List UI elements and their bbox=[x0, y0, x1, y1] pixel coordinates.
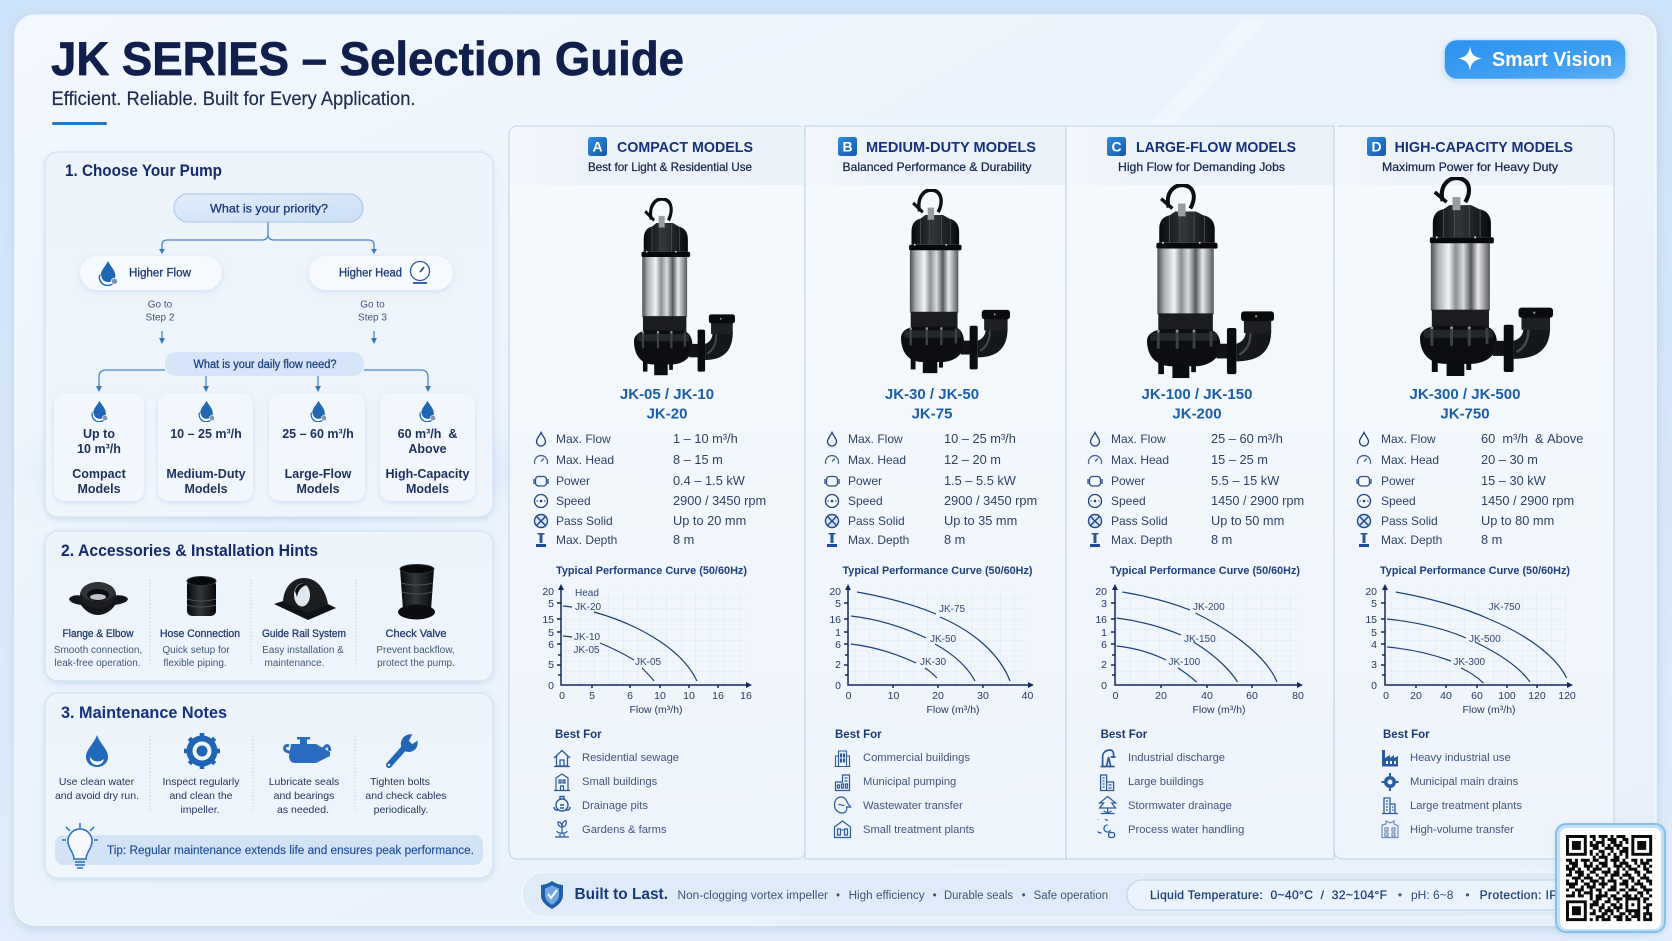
spec table B: 2900 / 3450 rpm bbox=[944, 493, 1037, 508]
performance chart D: 0 bbox=[1371, 680, 1377, 692]
performance chart C: 60 bbox=[1246, 690, 1258, 702]
spec table D bbox=[1357, 431, 1583, 547]
best for list B: Best For bbox=[835, 729, 882, 741]
accessory: hose connection bbox=[160, 576, 240, 669]
performance chart B: 0 bbox=[846, 690, 852, 702]
column header D: HIGH-CAPACITY MODELS bbox=[1394, 139, 1573, 156]
spec table D: 15 – 30 kW bbox=[1481, 473, 1547, 488]
model names B: JK-30 / JK-50 bbox=[885, 386, 979, 403]
note: inspect impeller: Inspect regularly bbox=[162, 776, 240, 788]
model card: medium-duty bbox=[158, 393, 253, 501]
panel: maintenance notes bbox=[45, 693, 493, 878]
performance chart D: 60 bbox=[1471, 690, 1483, 702]
footer spec pill bbox=[1127, 880, 1607, 910]
spec table B: 8 m bbox=[944, 532, 965, 547]
spec table C: Max. Head bbox=[1111, 453, 1169, 467]
column B: medium-duty models bbox=[805, 126, 1066, 859]
column header D bbox=[1367, 137, 1573, 174]
best for list D: Best For bbox=[1383, 729, 1430, 741]
accessory: guide rail system bbox=[262, 578, 346, 669]
performance chart A: Flow (m³/h) bbox=[629, 704, 683, 716]
accessory: check valve bbox=[376, 564, 455, 669]
performance chart B bbox=[829, 584, 1034, 716]
note: tighten bolts: periodically. bbox=[374, 804, 428, 816]
column header D: D bbox=[1371, 138, 1382, 154]
column header B bbox=[838, 137, 1036, 174]
spec table B: 1.5 – 5.5 kW bbox=[944, 473, 1017, 488]
performance chart A: JK-05 bbox=[574, 645, 600, 656]
title: JK SERIES – Selection Guide bbox=[51, 32, 684, 85]
note: go to step 3: Step 3 bbox=[358, 312, 387, 324]
note: inspect impeller: and clean the bbox=[169, 790, 233, 802]
best for list B: Wastewater transfer bbox=[863, 800, 963, 812]
spec table C: Max. Depth bbox=[1111, 533, 1172, 547]
tip bar bbox=[55, 823, 483, 868]
model card: medium-duty: Models bbox=[184, 482, 228, 496]
model card: high-capacity bbox=[380, 393, 475, 501]
spec table C: Max. Flow bbox=[1111, 432, 1166, 446]
performance chart C: JK-200 bbox=[1193, 602, 1225, 613]
best for list C: Large buildings bbox=[1128, 776, 1204, 788]
note: go to step 3: Go to bbox=[360, 300, 385, 310]
spec table A: Up to 20 mm bbox=[673, 513, 746, 528]
spec table D: 20 – 30 m bbox=[1481, 452, 1538, 467]
performance chart C: 80 bbox=[1292, 690, 1304, 702]
performance chart B: 0 bbox=[835, 680, 841, 692]
flowchart connectors bbox=[99, 222, 428, 388]
performance chart D: Flow (m³/h) bbox=[1462, 704, 1516, 716]
smart vision badge: Smart Vision bbox=[1492, 48, 1612, 71]
footer bar: built to last: Built to Last. bbox=[574, 886, 668, 903]
performance chart A: 0 bbox=[559, 690, 565, 702]
accessory: guide rail system: Easy installation & bbox=[262, 645, 344, 656]
performance chart D: 120 bbox=[1558, 690, 1576, 702]
pump image D bbox=[1420, 178, 1553, 376]
spec table A: Speed bbox=[556, 494, 591, 508]
footer bar: built to last: • bbox=[933, 890, 937, 902]
performance chart D: JK-300 bbox=[1453, 657, 1486, 668]
footer bar: built to last: Safe operation bbox=[1034, 890, 1108, 902]
accessory: check valve: Prevent backflow, bbox=[376, 645, 455, 656]
best for list D: Municipal main drains bbox=[1410, 776, 1519, 788]
performance chart D: 100 bbox=[1498, 690, 1516, 702]
performance chart D: 3 bbox=[1371, 659, 1377, 671]
spec table C: 15 – 25 m bbox=[1211, 452, 1268, 467]
tip bar: Tip: Regular maintenance extends life and ensures peak performance. bbox=[107, 845, 474, 857]
note: tighten bolts: and check cables bbox=[365, 790, 447, 802]
column header C: C bbox=[1111, 138, 1122, 154]
note: clean water: Use clean water bbox=[59, 776, 134, 788]
performance chart C: 40 bbox=[1201, 690, 1213, 702]
QR code bbox=[1556, 824, 1665, 932]
performance chart D: 4 bbox=[1371, 639, 1377, 651]
model card: compact: 10 m³/h bbox=[77, 442, 121, 456]
best for list C: Industrial discharge bbox=[1128, 752, 1225, 764]
column header C bbox=[1107, 137, 1296, 174]
best for list A bbox=[554, 729, 679, 837]
performance chart B: JK-75 bbox=[939, 604, 966, 615]
spec table B: 12 – 20 m bbox=[944, 452, 1001, 467]
spec table B: Power bbox=[848, 474, 882, 488]
performance chart A: 16 bbox=[712, 690, 724, 702]
model card: large-flow: Models bbox=[296, 482, 340, 496]
note: clean water bbox=[55, 735, 139, 802]
performance chart B: JK-30 bbox=[920, 657, 947, 668]
performance chart B: 20 bbox=[932, 690, 944, 702]
accessory: check valve: protect the pump. bbox=[377, 658, 455, 669]
pump image C bbox=[1147, 185, 1274, 378]
spec table A: Max. Depth bbox=[556, 533, 617, 547]
icon: light bulb bbox=[62, 823, 98, 868]
spec table A bbox=[534, 431, 766, 547]
performance chart C: 20 bbox=[1155, 690, 1167, 702]
model card: compact bbox=[54, 393, 144, 501]
spec table A: 2900 / 3450 rpm bbox=[673, 493, 766, 508]
performance chart A: JK-20 bbox=[575, 602, 602, 613]
pump image B bbox=[901, 190, 1010, 373]
spec table C bbox=[1088, 431, 1304, 547]
note: lubricate seals: and bearings bbox=[274, 790, 334, 802]
performance chart A: 5 bbox=[548, 627, 554, 639]
best for list A: Gardens & farms bbox=[582, 824, 667, 836]
column header C: LARGE-FLOW MODELS bbox=[1136, 139, 1296, 156]
note: go to step 2: Go to bbox=[148, 300, 172, 310]
performance chart B: 6 bbox=[835, 639, 841, 651]
performance chart A: 16 bbox=[740, 690, 752, 702]
column D: high-capacity models bbox=[1334, 126, 1614, 859]
question pill: daily flow: What is your daily flow need? bbox=[194, 359, 336, 371]
panel: accessories bbox=[45, 531, 493, 681]
footer bar: built to last: • bbox=[836, 890, 840, 902]
performance chart C: 16 bbox=[1095, 614, 1107, 626]
performance chart C bbox=[1095, 584, 1304, 716]
smart vision badge bbox=[1444, 40, 1626, 80]
spec table A: 1 – 10 m³/h bbox=[673, 431, 738, 446]
best for list D: Heavy industrial use bbox=[1410, 752, 1511, 764]
best for list B: Municipal pumping bbox=[863, 776, 956, 788]
note: lubricate seals bbox=[269, 737, 339, 816]
heading: maintenance notes: 3. Maintenance Notes bbox=[61, 704, 227, 722]
performance chart C: 6 bbox=[1101, 639, 1107, 651]
best for list B: Commercial buildings bbox=[863, 752, 970, 764]
performance chart A: 6 bbox=[548, 639, 554, 651]
footer spec pill: Protection: IP68 bbox=[1480, 888, 1572, 902]
question pill: priority bbox=[174, 194, 363, 222]
column header A: COMPACT MODELS bbox=[617, 139, 753, 156]
performance chart B: 40 bbox=[1022, 690, 1033, 702]
spec table A: Power bbox=[556, 474, 590, 488]
performance chart B: 30 bbox=[977, 690, 989, 702]
note: tighten bolts: Tighten bolts bbox=[370, 776, 430, 788]
heading: accessories: 2. Accessories & Installation Hints bbox=[61, 542, 318, 560]
performance chart B: 16 bbox=[829, 614, 841, 626]
heading: choose your pump: 1. Choose Your Pump bbox=[65, 162, 222, 180]
performance chart A: JK-10 bbox=[574, 632, 601, 643]
spec table D: Up to 80 mm bbox=[1481, 513, 1554, 528]
performance chart D: 5 bbox=[1371, 598, 1377, 610]
performance chart A: 15 bbox=[542, 614, 554, 626]
column header A: A bbox=[592, 138, 603, 154]
note: inspect impeller: impeller. bbox=[180, 804, 220, 816]
subtitle: Efficient. Reliable. Built for Every Application. bbox=[52, 89, 416, 110]
note: lubricate seals: Lubricate seals bbox=[269, 776, 339, 788]
chart title D: Typical Performance Curve (50/60Hz) bbox=[1380, 565, 1570, 577]
option: higher head: Higher Head bbox=[339, 268, 402, 280]
spec table D: Max. Flow bbox=[1381, 432, 1436, 446]
model card: high-capacity: Above bbox=[408, 442, 447, 456]
model card: high-capacity: High-Capacity bbox=[385, 467, 470, 481]
title underline bbox=[52, 122, 107, 125]
performance chart D: 0 bbox=[1383, 690, 1389, 702]
best for list D bbox=[1382, 729, 1522, 838]
performance chart C: 0 bbox=[1113, 690, 1119, 702]
performance chart D: 40 bbox=[1440, 690, 1452, 702]
performance chart B: JK-50 bbox=[930, 634, 957, 645]
footer bar: built to last: Durable seals bbox=[944, 890, 1013, 902]
icon: shield bbox=[541, 881, 563, 909]
spec table D: 60 m³/h & Above bbox=[1481, 431, 1583, 446]
performance chart A: 5 bbox=[589, 690, 595, 702]
footer spec pill: • bbox=[1398, 888, 1402, 902]
spec table C: 8 m bbox=[1211, 532, 1232, 547]
best for list A: Residential sewage bbox=[582, 752, 679, 764]
accessory: check valve: Check Valve bbox=[386, 628, 446, 640]
spec table D: Speed bbox=[1381, 494, 1416, 508]
spec table B: 10 – 25 m³/h bbox=[944, 431, 1016, 446]
spec table A: Max. Flow bbox=[556, 432, 611, 446]
performance chart A: JK-05 bbox=[635, 657, 662, 668]
model names D: JK-300 / JK-500 bbox=[1410, 386, 1520, 403]
panel: choose your pump bbox=[45, 152, 493, 517]
spec table C: Speed bbox=[1111, 494, 1146, 508]
accessory: flange and elbow: leak-free operation. bbox=[54, 658, 141, 669]
performance chart A: 5 bbox=[548, 598, 554, 610]
spec table A: 8 – 15 m bbox=[673, 452, 723, 467]
best for list A: Small buildings bbox=[582, 776, 658, 788]
accessory: hose connection: Hose Connection bbox=[160, 628, 240, 640]
performance chart A: 10 bbox=[654, 690, 666, 702]
performance chart B: 5 bbox=[835, 598, 841, 610]
column header C: High Flow for Demanding Jobs bbox=[1118, 160, 1285, 174]
spec table B: Up to 35 mm bbox=[944, 513, 1017, 528]
performance chart C: 20 bbox=[1095, 586, 1107, 598]
performance chart C: Flow (m³/h) bbox=[1192, 704, 1246, 716]
footer bar: built to last: Non-clogging vortex impeller bbox=[678, 890, 828, 902]
accessory: hose connection: Quick setup for bbox=[162, 645, 230, 656]
best for list C: Best For bbox=[1101, 729, 1148, 741]
performance chart D: 20 bbox=[1410, 690, 1422, 702]
performance chart D: 120 bbox=[1528, 690, 1546, 702]
option: higher flow: Higher Flow bbox=[129, 268, 192, 280]
performance chart B: Flow (m³/h) bbox=[926, 704, 980, 716]
option: higher head bbox=[309, 256, 453, 290]
performance chart A: 5 bbox=[548, 659, 554, 671]
column header B: B bbox=[842, 138, 853, 154]
model card: large-flow bbox=[269, 393, 365, 501]
performance chart C: 2 bbox=[1101, 659, 1107, 671]
flowchart arrowheads bbox=[96, 249, 431, 392]
best for list C bbox=[1094, 729, 1244, 838]
best for list A: Best For bbox=[555, 729, 602, 741]
performance chart C: JK-150 bbox=[1184, 634, 1216, 645]
performance chart B: 1 bbox=[835, 627, 841, 639]
performance chart A: 10 bbox=[683, 690, 695, 702]
model card: medium-duty: 10 – 25 m³/h bbox=[170, 427, 242, 441]
chart title A: Typical Performance Curve (50/60Hz) bbox=[556, 565, 747, 577]
performance chart D: 20 bbox=[1365, 586, 1377, 598]
column header D: Maximum Power for Heavy Duty bbox=[1382, 160, 1558, 174]
model card: compact: Compact bbox=[72, 467, 127, 481]
spec table D: 8 m bbox=[1481, 532, 1502, 547]
spec table C: 25 – 60 m³/h bbox=[1211, 431, 1283, 446]
performance chart D: 5 bbox=[1371, 627, 1377, 639]
spec table C: Pass Solid bbox=[1111, 514, 1168, 528]
best for list A: Drainage pits bbox=[582, 800, 648, 812]
accessory: flange and elbow: Flange & Elbow bbox=[62, 628, 134, 640]
spec table C: 5.5 – 15 kW bbox=[1211, 473, 1280, 488]
icon: sparkle bbox=[1458, 46, 1482, 71]
footer spec pill: Liquid Temperature: 0~40°C / 32~104°F bbox=[1150, 888, 1387, 902]
best for list D: Large treatment plants bbox=[1410, 800, 1522, 812]
pump image A bbox=[634, 199, 735, 375]
question pill: priority: What is your priority? bbox=[210, 202, 328, 216]
performance chart B: 10 bbox=[888, 690, 899, 702]
note: go to step 2: Step 2 bbox=[146, 312, 175, 324]
performance chart B: 20 bbox=[829, 586, 841, 598]
accessory: guide rail system: maintenance. bbox=[264, 658, 325, 669]
best for list B: Small treatment plants bbox=[863, 824, 975, 836]
column header A: Best for Light & Residential Use bbox=[588, 160, 752, 174]
footer spec pill: • bbox=[1465, 888, 1470, 902]
model names A: JK-05 / JK-10 bbox=[620, 386, 714, 403]
spec table D: 1450 / 2900 rpm bbox=[1481, 493, 1574, 508]
model card: high-capacity: Models bbox=[406, 482, 449, 496]
accessory: flange and elbow: Smooth connection, bbox=[54, 645, 142, 656]
performance chart A: 6 bbox=[627, 690, 633, 702]
spec table A: 8 m bbox=[673, 532, 694, 547]
spec table D: Max. Head bbox=[1381, 453, 1439, 467]
note: tighten bolts bbox=[365, 735, 447, 816]
spec table A: Pass Solid bbox=[556, 514, 613, 528]
best for list D: High-volume transfer bbox=[1410, 824, 1514, 836]
spec table B bbox=[825, 431, 1037, 547]
spec table B: Pass Solid bbox=[848, 514, 905, 528]
footer bar: built to last bbox=[522, 872, 1607, 917]
performance chart D bbox=[1365, 584, 1576, 716]
performance chart D: JK-750 bbox=[1489, 602, 1521, 613]
spec table B: Max. Depth bbox=[848, 533, 909, 547]
spec table B: Max. Head bbox=[848, 453, 906, 467]
accessory: hose connection: flexible piping. bbox=[163, 658, 227, 669]
performance chart A: 0 bbox=[548, 680, 554, 692]
question pill: daily flow bbox=[165, 352, 364, 376]
performance chart A bbox=[542, 584, 752, 716]
model card: medium-duty: Medium-Duty bbox=[166, 467, 246, 481]
best for list C: Process water handling bbox=[1128, 824, 1244, 836]
spec table A: Max. Head bbox=[556, 453, 614, 467]
column header A bbox=[588, 137, 753, 174]
column A: compact models bbox=[509, 126, 805, 859]
model names D: JK-750 bbox=[1440, 406, 1490, 422]
spec table B: Max. Flow bbox=[848, 432, 903, 446]
column C: large-flow models bbox=[1066, 126, 1334, 859]
spec table A: 0.4 – 1.5 kW bbox=[673, 473, 746, 488]
performance chart A: Head bbox=[575, 588, 599, 599]
spec table D: Max. Depth bbox=[1381, 533, 1442, 547]
performance chart C: 0 bbox=[1101, 680, 1107, 692]
best for list B bbox=[834, 729, 975, 838]
model card: large-flow: Large-Flow bbox=[285, 467, 352, 481]
spec table C: Power bbox=[1111, 474, 1145, 488]
note: clean water: and avoid dry run. bbox=[55, 790, 139, 802]
best for list C: Stormwater drainage bbox=[1128, 800, 1232, 812]
chart title B: Typical Performance Curve (50/60Hz) bbox=[842, 565, 1033, 577]
performance chart B: 2 bbox=[835, 659, 841, 671]
footer spec pill: pH: 6~8 bbox=[1411, 888, 1454, 902]
option: higher flow bbox=[80, 256, 222, 290]
note: inspect impeller bbox=[162, 733, 240, 816]
spec table D: Pass Solid bbox=[1381, 514, 1438, 528]
model card: compact: Up to bbox=[83, 427, 115, 441]
column header B: MEDIUM-DUTY MODELS bbox=[866, 139, 1036, 156]
model names C: JK-100 / JK-150 bbox=[1142, 386, 1252, 403]
spec table D: Power bbox=[1381, 474, 1415, 488]
performance chart C: JK-100 bbox=[1168, 657, 1201, 668]
model card: high-capacity: 60 m³/h & bbox=[398, 427, 457, 441]
spec table C: 1450 / 2900 rpm bbox=[1211, 493, 1304, 508]
spec table C: Up to 50 mm bbox=[1211, 513, 1284, 528]
accessory: flange and elbow bbox=[54, 582, 142, 669]
column header B: Balanced Performance & Durability bbox=[842, 160, 1032, 174]
performance chart C: 3 bbox=[1101, 598, 1107, 610]
model names A: JK-20 bbox=[647, 406, 687, 422]
footer bar: built to last: • bbox=[1022, 890, 1026, 902]
model names B: JK-75 bbox=[912, 406, 952, 422]
model card: compact: Models bbox=[77, 482, 121, 496]
accessory: guide rail system: Guide Rail System bbox=[262, 628, 346, 640]
performance chart D: JK-500 bbox=[1469, 634, 1501, 645]
model card: large-flow: 25 – 60 m³/h bbox=[282, 427, 354, 441]
note: lubricate seals: as needed. bbox=[277, 804, 329, 816]
model names C: JK-200 bbox=[1172, 406, 1222, 422]
performance chart C: 1 bbox=[1101, 627, 1107, 639]
spec table B: Speed bbox=[848, 494, 883, 508]
performance chart D: 15 bbox=[1365, 614, 1377, 626]
chart title C: Typical Performance Curve (50/60Hz) bbox=[1110, 565, 1300, 577]
performance chart A: 20 bbox=[542, 586, 554, 598]
footer bar: built to last: High efficiency bbox=[849, 890, 925, 902]
